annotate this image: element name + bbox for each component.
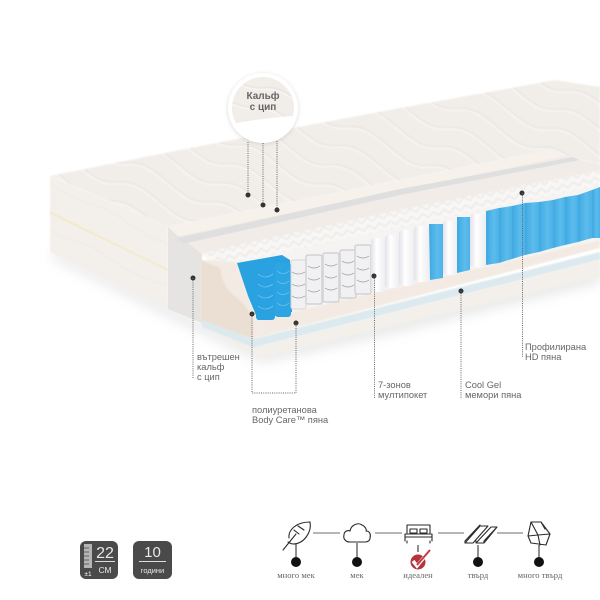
label: polyurethane foam: полиуретанова: [252, 405, 318, 415]
label: inner cover: кальф: [197, 362, 225, 372]
blue pocket 1: [256, 266, 275, 320]
mattress side panel: [50, 176, 168, 309]
pocket: [291, 260, 306, 309]
scale connectors: [313, 532, 523, 534]
blue pocket 2: [275, 263, 291, 317]
label: cool gel memory foam: [458, 288, 522, 400]
label: profiled HD foam: HD пяна: [525, 352, 562, 362]
seven-zone pockets: [291, 187, 600, 309]
icon: cloud, soft: [344, 524, 370, 580]
icon: feather, very soft: [277, 522, 316, 580]
label: polyurethane foam: Body Care™ пяна: [252, 415, 329, 425]
quilted foam layer: [202, 170, 600, 270]
label: seven-zone multipocket: 7-зонов: [378, 380, 411, 390]
label: inner cover: с цип: [197, 372, 220, 382]
cream piping: [50, 211, 168, 271]
pocket: [323, 253, 339, 302]
icon: slats, firm: твърд: [468, 570, 489, 580]
mattress: [50, 80, 600, 362]
icon: rock, very firm: много твърд: [518, 570, 563, 580]
pocket: [340, 250, 356, 298]
mattress top surface: [50, 80, 600, 227]
label: seven-zone multipocket: [372, 274, 428, 400]
icon: rock, very firm: [518, 522, 563, 580]
pocket: [355, 245, 371, 294]
label: profiled HD foam: [520, 190, 587, 362]
label: inner cover: [190, 276, 240, 382]
label: polyurethane foam: [250, 312, 329, 425]
polyurethane foam block: [201, 240, 600, 339]
magnifier callout: cover with zip: с цип: [250, 102, 276, 113]
base layer: [202, 260, 600, 358]
icon: slats, firm: [465, 525, 497, 580]
alternating blue and white pockets: [429, 214, 486, 280]
cool gel layer: [202, 252, 600, 348]
spring cavity: [237, 185, 600, 322]
label: cool gel memory foam: Cool Gel: [465, 380, 501, 390]
firmness scale: [277, 522, 563, 580]
blue profiled HD foam: [486, 187, 600, 265]
infographic: [50, 72, 600, 580]
label: cool gel memory foam: мемори пяна: [465, 390, 522, 400]
icon: cloud, soft: мек: [350, 570, 365, 580]
badge: height 22 cm: СМ: [98, 565, 112, 575]
pocket: [306, 255, 322, 304]
blue zone left: [237, 255, 292, 320]
leaders from callout: [246, 141, 280, 212]
inner cover panel: [168, 226, 202, 323]
foam block darker face: [201, 260, 253, 339]
cream layer edge: [168, 151, 565, 236]
magnifier callout: cover with zip: Кальф: [246, 90, 280, 102]
label: profiled HD foam: Профилирана: [525, 342, 587, 352]
white pockets: [371, 226, 429, 292]
badge: warranty 10 years: [133, 541, 172, 579]
label: seven-zone multipocket: мултипокет: [378, 390, 428, 400]
grey layer: [177, 157, 580, 244]
label: inner cover: вътрешен: [197, 352, 240, 362]
badge: height 22 cm: 22: [96, 545, 114, 562]
badge: warranty 10 years: 10: [144, 544, 161, 561]
icon: feather, very soft: много мек: [277, 570, 316, 580]
badge: height 22 cm: [80, 541, 118, 579]
badge: height 22 cm: ±1: [84, 571, 92, 578]
badge: warranty 10 years: години: [141, 566, 164, 575]
floor shadow: [52, 250, 600, 362]
icon: bed, ideal: [403, 525, 433, 580]
cut top layers: [168, 151, 600, 254]
icon: bed, ideal: идеален: [403, 570, 433, 580]
magnifier callout: cover with zip: [228, 73, 298, 144]
